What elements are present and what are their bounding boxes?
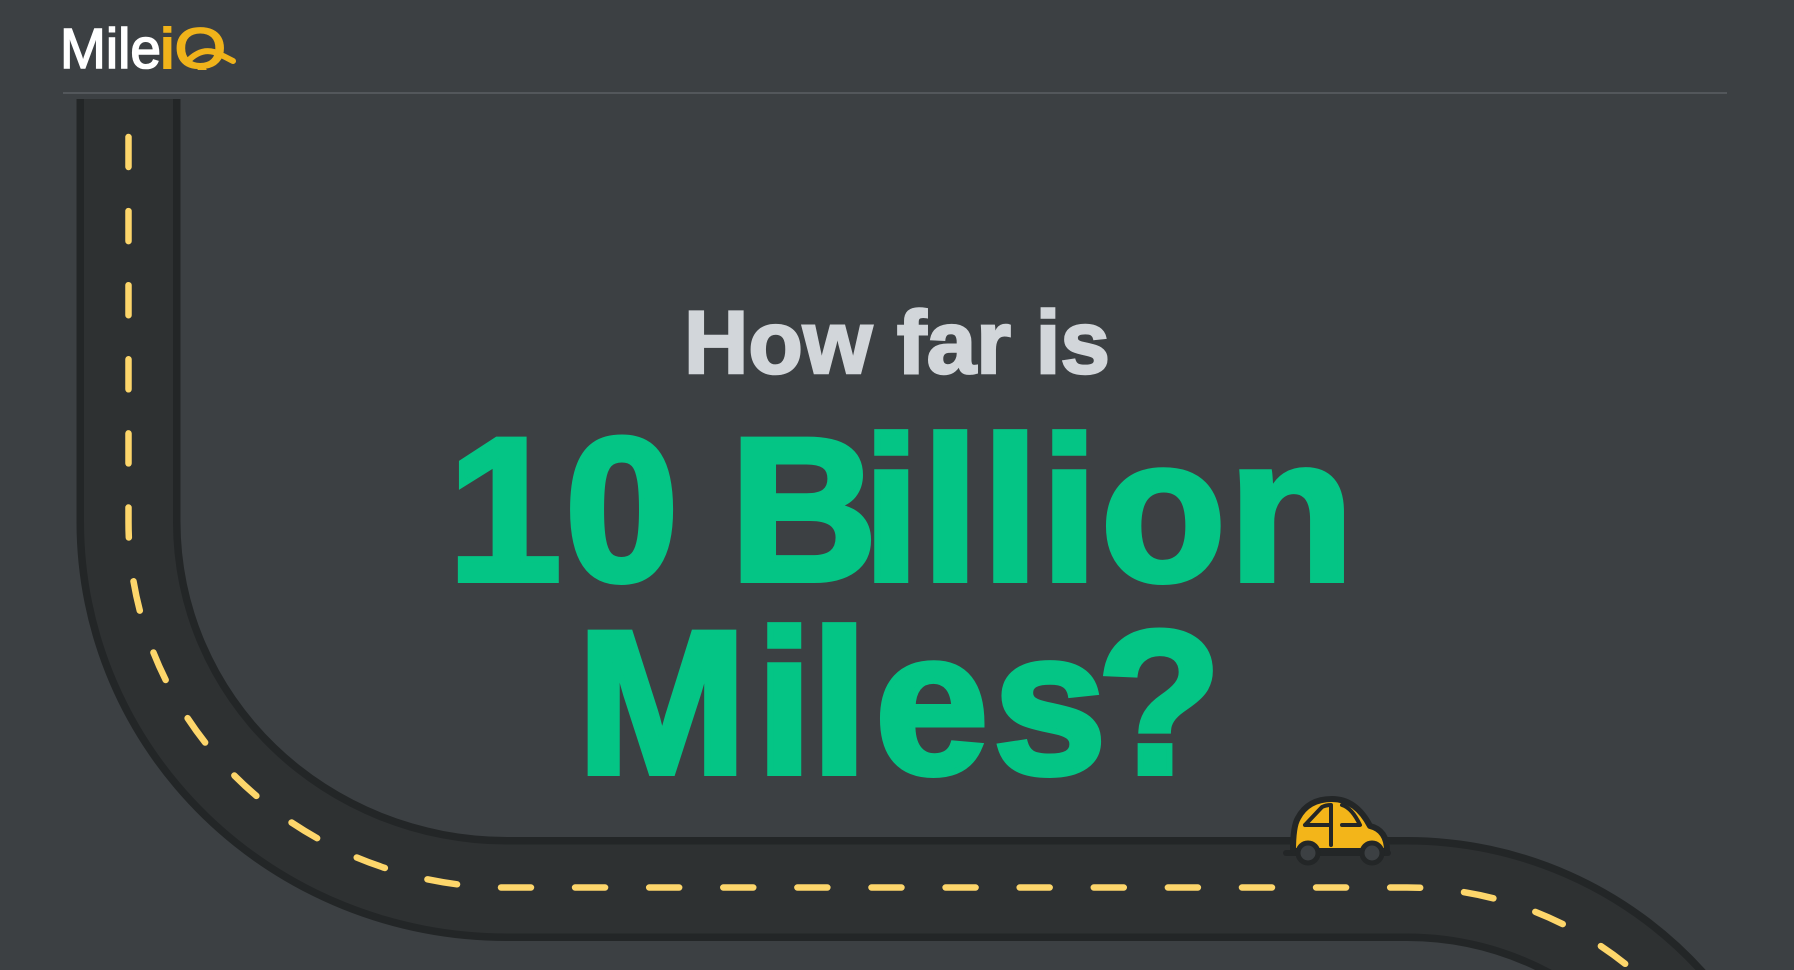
logo: MileIQ <box>64 26 236 70</box>
heading: 10 Billion: 10 Billion <box>448 396 1354 624</box>
heading: Miles?: Miles? <box>577 589 1222 817</box>
logo: MileIQ: Mile <box>60 17 161 81</box>
logo: MileIQ: iQ <box>160 17 226 81</box>
icon: yellow car <box>1286 799 1388 863</box>
heading: How far is: How far is <box>684 292 1110 392</box>
